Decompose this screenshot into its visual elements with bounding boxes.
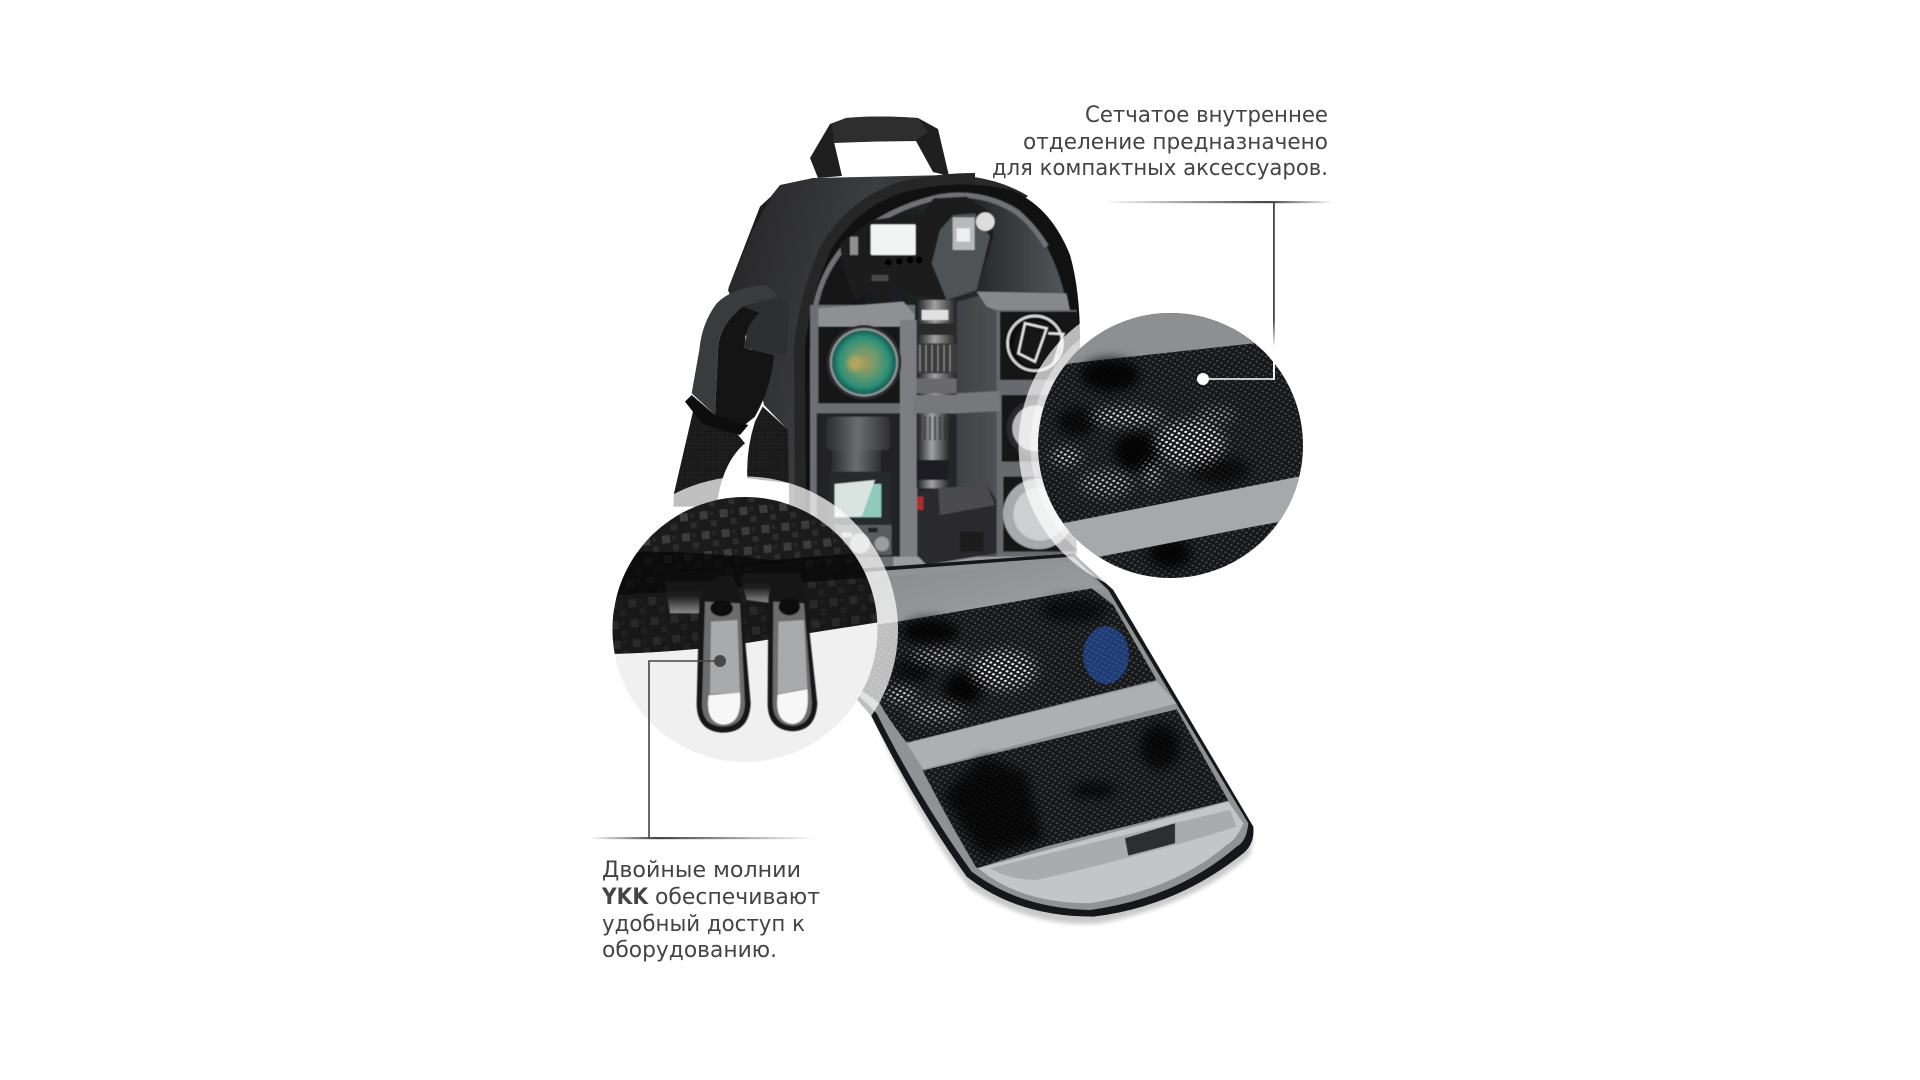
side shoulder strap (685, 285, 789, 435)
text block: YKK zippers: обеспечивают (655, 885, 820, 910)
center lens lower (917, 413, 950, 488)
top carry handle (810, 116, 949, 178)
light showing through mesh (1045, 400, 1240, 504)
lining rim (814, 195, 1047, 313)
text block: mesh compartment: для компактных аксессуаров. (992, 156, 1328, 181)
zipper binding band (805, 184, 975, 560)
fabric and zipper tape (610, 495, 880, 654)
leader line: mesh callout (1103, 201, 1333, 385)
right slider (740, 563, 805, 603)
text block: mesh compartment: отделение предназначено (1023, 130, 1328, 155)
backpack side panel (728, 175, 1028, 560)
zipper sliders and pulls (663, 563, 817, 733)
top lining band (847, 562, 1103, 633)
flap soft shadow (873, 717, 1253, 924)
backpack illustration (673, 116, 1254, 924)
flap outer edge (840, 553, 1254, 917)
text block: YKK zippers: оборудованию. (602, 938, 777, 963)
lens caps right column (1000, 312, 1077, 552)
middle lining strap (907, 682, 1177, 769)
text block: YKK zippers: YKK (601, 885, 649, 910)
left slider (663, 570, 738, 613)
mesh magnifier (1033, 310, 1310, 583)
leader line: zipper callout (590, 655, 815, 839)
translucent ring (1018, 294, 1322, 598)
padded bottom of flap (978, 802, 1243, 903)
text block: YKK zippers: Двойные молнии (602, 858, 801, 883)
callout: mesh detail circle (1018, 313, 1303, 583)
padded dividers (810, 292, 1077, 587)
text block: mesh compartment: Сетчатое внутреннее (1085, 103, 1328, 128)
text block: mesh compartment (992, 103, 1328, 181)
interior with dividers and gear (809, 194, 1077, 587)
lower mesh pocket (923, 709, 1228, 868)
blue object behind mesh (1083, 626, 1129, 684)
shadows under mesh (1057, 358, 1250, 568)
camera body (840, 197, 995, 300)
lens compartment top left (818, 325, 901, 403)
grey strap (1063, 475, 1307, 557)
text block: YKK zippers: удобный доступ к (602, 912, 805, 937)
flap label patch (1125, 823, 1175, 856)
interior lining (809, 194, 1073, 573)
center lens upper (917, 300, 957, 395)
main compartment opening (805, 184, 1082, 575)
text block: YKK zippers (601, 858, 820, 963)
back shoulder pad and mesh (673, 185, 790, 507)
battery unit (917, 485, 997, 565)
translucent ring (592, 476, 898, 782)
open front flap (840, 553, 1254, 924)
callout: zipper detail circle (612, 476, 898, 762)
flash unit (817, 413, 900, 557)
right zipper pull (768, 573, 817, 731)
flap lining (847, 557, 1248, 910)
grey lining top (1066, 313, 1254, 365)
upper mesh pocket (847, 588, 1157, 745)
zipper magnifier (610, 495, 880, 765)
left zipper pull (697, 575, 751, 733)
